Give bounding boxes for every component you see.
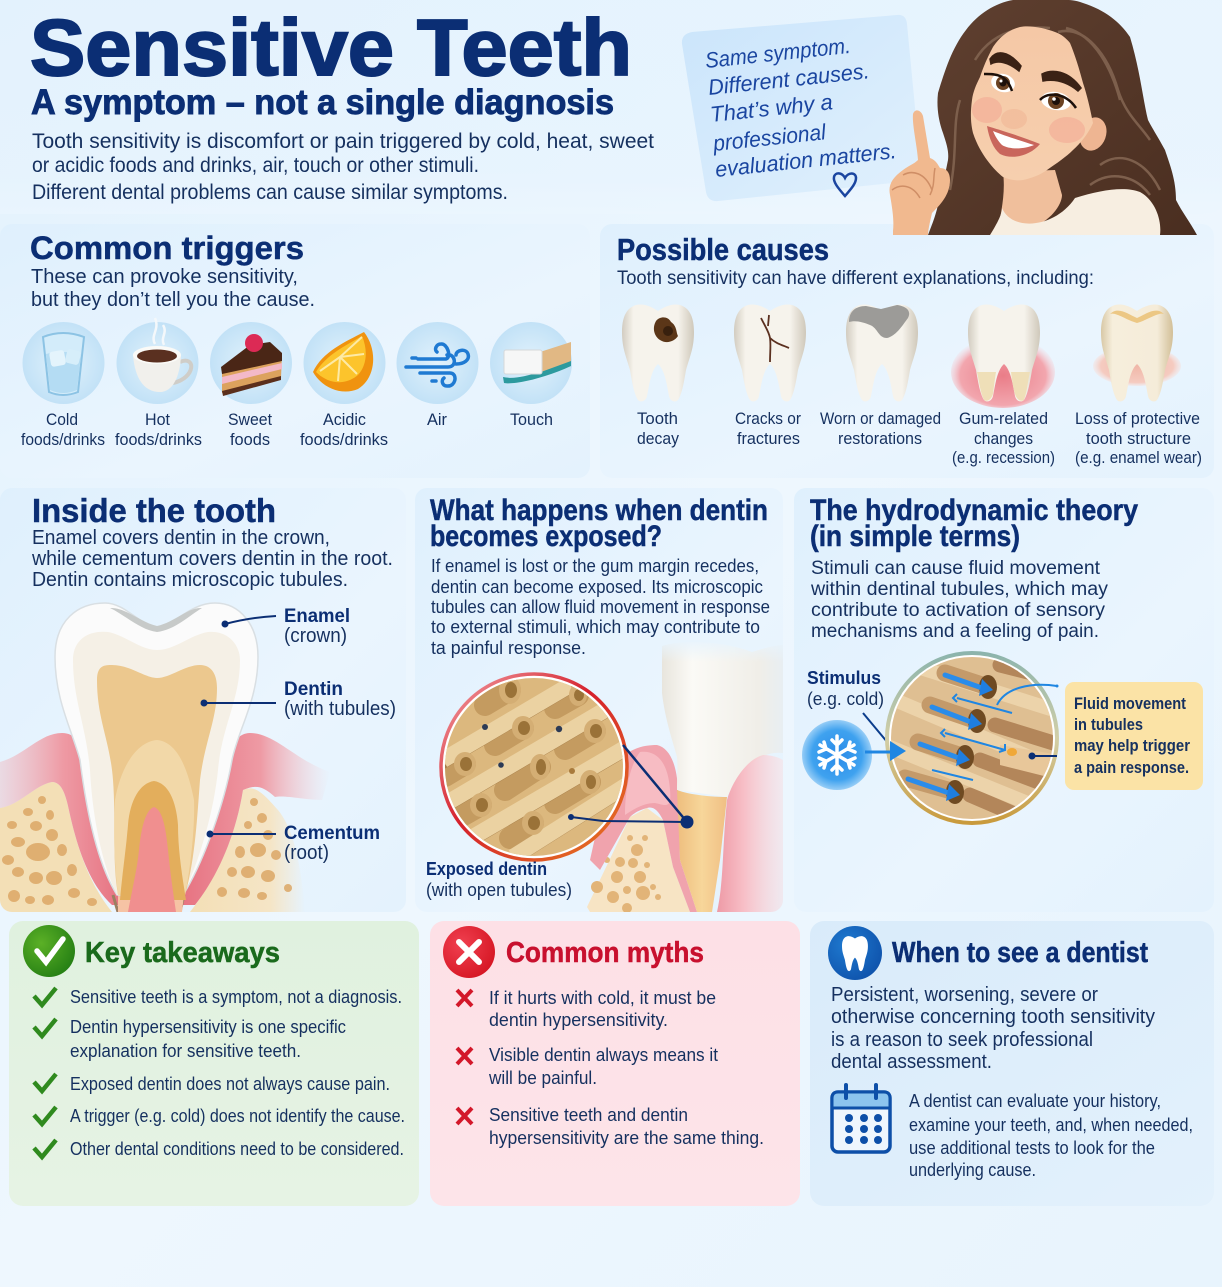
label: cementum (206, 823, 380, 864)
checklist: Other dental conditions need to be considered. (70, 1139, 404, 1159)
dentist evaluation text (909, 1091, 1193, 1180)
icon: snowflake (802, 720, 872, 790)
description: is a reason to seek professional (831, 1029, 1093, 1051)
description: If enamel is lost or the gum margin recedes, (431, 556, 759, 576)
heading: becomes exposed? (430, 520, 662, 553)
description: within dentinal tubules, which may (810, 579, 1109, 600)
icon: tooth circle (828, 926, 882, 980)
trigger: cold foods/drinks: foods/drinks (21, 430, 105, 449)
description: but they don’t tell you the cause. (31, 289, 315, 311)
cause: worn or damaged restorations: restorations (838, 429, 922, 448)
description (31, 527, 393, 591)
myth list: Visible dentin always means it (489, 1045, 718, 1065)
description (831, 984, 1155, 1073)
description: dental assessment. (831, 1051, 992, 1073)
trigger: cold foods/drinks: Cold (46, 410, 78, 429)
cause: worn or damaged restorations: Worn or damaged (820, 409, 941, 428)
label: dentin: Dentin (284, 679, 343, 700)
panel: hydrodynamic theory (794, 488, 1203, 825)
cause: gum-related changes: changes (974, 429, 1033, 448)
description (431, 556, 770, 658)
magnified dentin tubules (440, 660, 630, 865)
checklist: explanation for sensitive teeth. (70, 1041, 301, 1061)
myth list: hypersensitivity are the same thing. (489, 1128, 764, 1148)
woman's face (971, 26, 1093, 180)
trigger: touch: Touch (510, 410, 553, 429)
icon: heart (834, 173, 856, 196)
myth list: If it hurts with cold, it must be (489, 988, 716, 1008)
woman's eyes and brows (984, 53, 1081, 112)
checklist: Exposed dentin does not always cause pain. (70, 1074, 390, 1094)
checklist (34, 987, 405, 1159)
stimulus label: (e.g. cold) (807, 689, 884, 709)
label: cementum: Cementum (284, 823, 380, 844)
myth list: dentin hypersensitivity. (489, 1010, 668, 1030)
cause: tooth decay: decay (637, 429, 679, 448)
checklist: Sensitive teeth is a symptom, not a diagnosis. (70, 987, 402, 1007)
myth list: will be painful. (488, 1068, 597, 1088)
header band (0, 0, 1222, 214)
trigger: hot foods/drinks (115, 318, 202, 449)
heading: When to see a dentist (892, 937, 1148, 969)
cause: gum-related changes: Gum-related (959, 409, 1048, 428)
pointer lines to exposed dentin (568, 745, 694, 828)
description: These can provoke sensitivity, (31, 266, 298, 288)
callout: fluid movement: may help trigger (1074, 736, 1190, 755)
cause: worn or damaged restorations (820, 304, 941, 448)
cause: gum-related changes (951, 304, 1055, 467)
label: enamel: Enamel (284, 606, 350, 627)
tooth cross-section diagram (0, 603, 330, 912)
icon: calendar (832, 1085, 890, 1152)
illustration: smiling woman pointing (890, 0, 1197, 235)
icon: green check circle (23, 925, 75, 977)
description: Persistent, worsening, severe or (831, 984, 1098, 1006)
description: Tooth sensitivity can have different explanations, including: (617, 268, 1094, 289)
callout: fluid movement: in tubules (1074, 715, 1143, 734)
arrow: stimulus into tubules (865, 741, 906, 761)
description: dentin can become exposed. Its microscopic (431, 577, 763, 597)
heading (810, 494, 1138, 553)
trigger: acidic foods/drinks: Acidic (323, 410, 366, 429)
trigger: acidic foods/drinks: foods/drinks (300, 430, 388, 449)
checklist: Dentin hypersensitivity is one specific (70, 1017, 346, 1037)
cause: loss of protective tooth structure (1075, 304, 1202, 467)
cause: gum-related changes: (e.g. recession) (952, 448, 1055, 467)
description: contribute to activation of sensory (811, 600, 1106, 621)
stimulus label (807, 668, 888, 743)
description (810, 558, 1109, 642)
dentist evaluation text: A dentist can evaluate your history, (909, 1091, 1161, 1111)
cause: loss of protective tooth structure: tooth structure (1086, 429, 1191, 448)
heading: Inside the tooth (32, 492, 276, 529)
trigger: acidic foods/drinks (300, 322, 388, 449)
dentist evaluation text: examine your teeth, and, when needed, (909, 1115, 1193, 1135)
trigger: sweet foods (210, 322, 292, 449)
heading: Possible causes (617, 232, 829, 267)
label: cementum: (root) (284, 842, 329, 864)
callout note: Different causes. (707, 58, 871, 100)
callout: fluid movement (1065, 682, 1203, 790)
myth list: Sensitive teeth and dentin (489, 1105, 688, 1125)
callout: fluid movement: Fluid movement (1074, 694, 1186, 713)
description: Stimuli can cause fluid movement (811, 558, 1101, 579)
myth list (457, 988, 764, 1148)
heading: The hydrodynamic theory (810, 494, 1138, 527)
description: while cementum covers dentin in the root. (31, 548, 393, 570)
trigger: hot foods/drinks: Hot (145, 410, 170, 429)
cause: tooth decay (622, 304, 694, 448)
heading: Key takeaways (85, 937, 280, 969)
cause: loss of protective tooth structure: (e.g. enamel wear) (1075, 448, 1202, 467)
description: mechanisms and a feeling of pain. (811, 621, 1099, 642)
intro text: or acidic foods and drinks, air, touch or other stimuli. (32, 154, 479, 177)
panel: when to see a dentist (810, 921, 1214, 1206)
cause: cracks or fractures: Cracks or (735, 409, 801, 428)
cause: tooth decay: Tooth (637, 409, 678, 428)
panel: common triggers (0, 224, 590, 478)
callout note: professional (711, 119, 828, 156)
label: enamel (222, 606, 350, 647)
label: dentin (200, 679, 396, 720)
heading: Common triggers (30, 230, 304, 266)
panel: key takeaways (9, 921, 419, 1206)
subtitle: A symptom – not a single diagnosis (31, 83, 614, 122)
heading: What happens when dentin (430, 494, 768, 527)
callout note: Same symptom. (704, 33, 852, 73)
intro text: Tooth sensitivity is discomfort or pain triggered by cold, heat, sweet (32, 130, 654, 153)
intro text: Different dental problems can cause similar symptoms. (32, 181, 508, 204)
heading: (in simple terms) (810, 520, 1020, 553)
stimulus label: Stimulus (807, 668, 881, 688)
woman's sweater and neck (990, 170, 1160, 235)
heading: Common myths (506, 937, 704, 969)
magnified tubules with fluid arrows (885, 653, 1060, 825)
label: exposed dentin: Exposed dentin (426, 859, 547, 879)
trigger: air (396, 322, 478, 429)
description: ta painful response. (431, 638, 586, 658)
checklist: A trigger (e.g. cold) does not identify the cause. (70, 1106, 405, 1126)
cause: cracks or fractures: fractures (737, 429, 800, 448)
trigger: sweet foods: foods (230, 430, 270, 449)
cause: loss of protective tooth structure: Loss of protective (1075, 409, 1200, 428)
label: dentin: (with tubules) (284, 698, 396, 720)
cause: cracks or fractures (734, 304, 806, 448)
label: enamel: (crown) (284, 625, 347, 647)
trigger: hot foods/drinks: foods/drinks (115, 430, 202, 449)
panel: common myths (430, 921, 800, 1206)
description: Enamel covers dentin in the crown, (32, 527, 330, 549)
trigger: sweet foods: Sweet (228, 410, 272, 429)
trigger: air: Air (427, 410, 447, 429)
callout note: evaluation matters. (714, 138, 898, 182)
label: exposed dentin (426, 859, 572, 900)
description: to external stimuli, which may contribute to (431, 617, 760, 637)
panel: possible causes (600, 224, 1214, 478)
icon: red x circle (443, 926, 495, 978)
heading (430, 494, 768, 553)
panel: what happens when dentin becomes exposed (415, 488, 783, 913)
title: Sensitive Teeth (30, 3, 632, 92)
callout: fluid movement: a pain response. (1074, 758, 1189, 777)
trigger: touch (490, 322, 572, 429)
intro text (32, 130, 654, 204)
panel: inside the tooth (0, 488, 406, 912)
dentist evaluation text: underlying cause. (909, 1160, 1036, 1180)
description: tubules can allow fluid movement in response (431, 597, 770, 617)
trigger: cold foods/drinks (21, 322, 105, 449)
description: otherwise concerning tooth sensitivity (831, 1006, 1155, 1028)
callout note (682, 15, 921, 201)
label: exposed dentin: (with open tubules) (426, 880, 572, 900)
callout note: That’s why a (709, 89, 834, 127)
woman's ear (1075, 114, 1111, 154)
exposed root illustration (587, 640, 783, 913)
description: Dentin contains microscopic tubules. (32, 569, 348, 591)
description (31, 266, 315, 311)
woman's pointing hand (890, 110, 950, 235)
dentist evaluation text: use additional tests to look for the (909, 1138, 1155, 1158)
woman's nose, cheeks and smile (972, 97, 1085, 157)
